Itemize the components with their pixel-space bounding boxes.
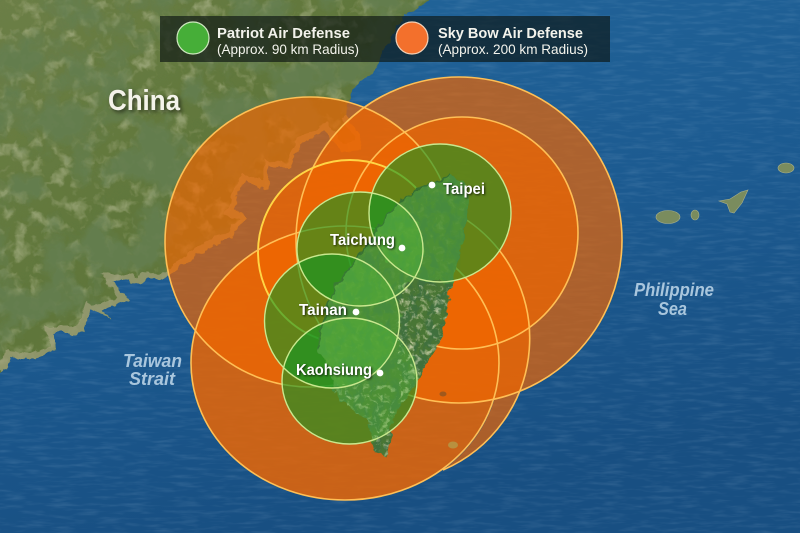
Patriot circle outlines [264,144,511,444]
city marker: Tainan: Tainan [299,302,347,319]
panel: Patriot coverage fills [264,144,511,444]
panel: Sky Bow coverage circles [165,77,622,500]
Sky Bow circle: south-west [191,226,499,500]
legend text: Patriot: Patriot Air Defense [217,25,350,42]
city marker: Kaohsiung: Kaohsiung [296,362,372,379]
Patriot fill: Taichung [297,192,423,306]
city marker: Taichung: Taichung [330,232,395,249]
legend text: Sky Bow: (Approx. 200 km Radius) [438,41,588,57]
legend text: Patriot [217,25,359,57]
legend [160,16,610,62]
legend text: Sky Bow [438,25,588,57]
legend text: Sky Bow: Sky Bow Air Defense [438,25,583,42]
label: Taiwan Strait: Taiwan [123,351,182,371]
small islands inside coverage [440,392,458,448]
legend icon: Sky Bow orange circle [396,22,428,54]
Sky Bow circle: north-east inner [346,117,578,349]
label: China: China [108,85,181,117]
legend icon: Patriot green circle [177,22,209,54]
Patriot fill: Kaohsiung [282,318,417,444]
label: Taiwan Strait: Strait [129,369,176,389]
Sky Bow circle: south-east [443,217,530,470]
legend background [160,16,610,62]
label: Philippine Sea [634,280,714,319]
map: Philippine Sea islands [656,163,794,224]
map: China landmass [0,0,450,390]
Patriot fill: Taipei [369,144,511,282]
Patriot fill: Tainan [264,254,400,388]
label: Philippine Sea: Philippine [634,280,714,300]
Sky Bow circle: north-east outer [296,77,622,403]
label: Philippine Sea: Sea [658,299,687,319]
legend text: Patriot: (Approx. 90 km Radius) [217,41,359,57]
label: Taiwan Strait [123,351,182,389]
Sky Bow circle outlines [165,77,622,500]
city marker: Taipei: Taipei [443,181,485,198]
map: Taiwan island [317,174,470,458]
Sky Bow circle: central [258,160,442,344]
Sky Bow circle: west [165,97,455,387]
